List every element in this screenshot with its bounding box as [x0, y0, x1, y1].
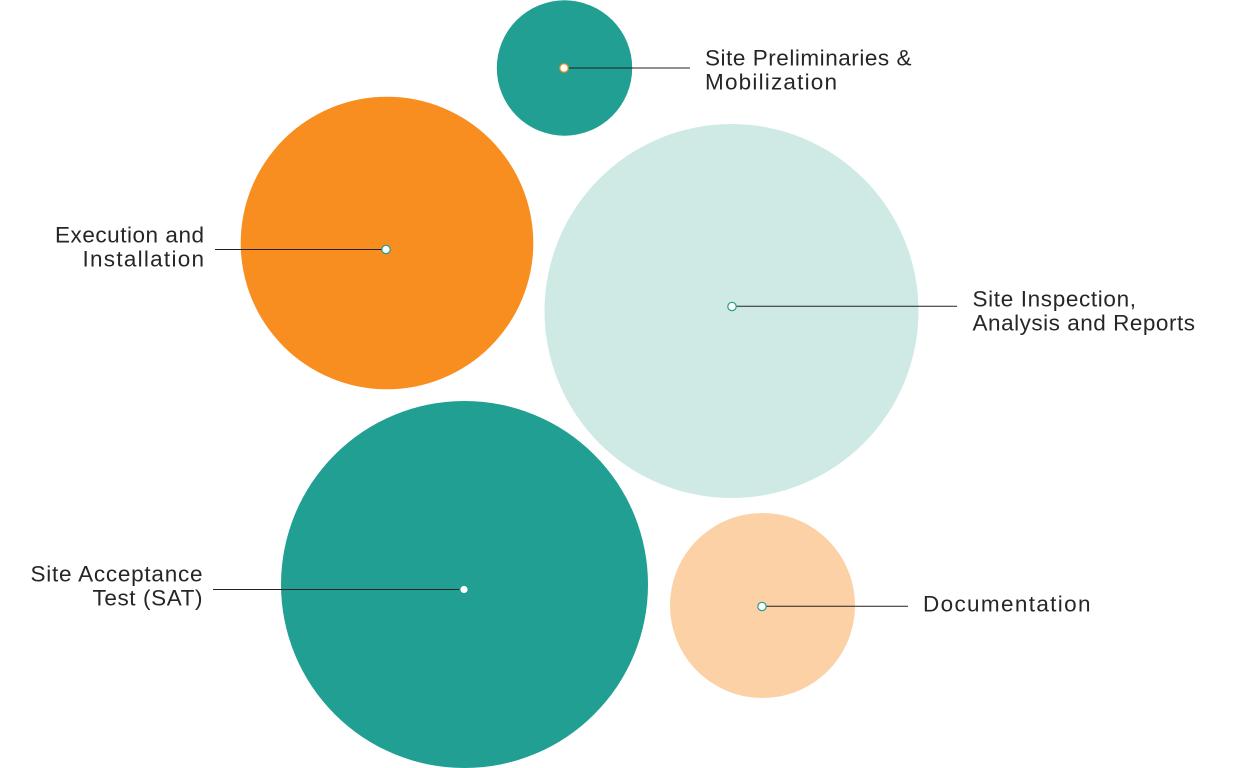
bubble: Site Acceptance Test (SAT): [30, 401, 648, 768]
bubble: Site Preliminaries & Mobilization: Mobilization: [705, 70, 837, 94]
bubble: Documentation: Documentation: [923, 592, 1090, 616]
bubble: Execution and Installation: Execution and: [55, 222, 204, 248]
bubble: Site Inspection, Analysis and Reports: Site Inspection,: [972, 286, 1136, 312]
bubble: Site Inspection, Analysis and Reports: [544, 124, 1195, 498]
bubble: Site Acceptance Test (SAT): Test (SAT): [92, 586, 202, 610]
bubble: Site Preliminaries & Mobilization: [497, 0, 912, 136]
bubble: Site Acceptance Test (SAT): Site Acceptance: [30, 562, 202, 586]
bubble: Documentation: [670, 513, 1090, 698]
bubble: Site Preliminaries & Mobilization: Site Preliminaries &: [705, 46, 912, 70]
bubble: Execution and Installation: Installation: [82, 246, 204, 272]
bubble: Execution and Installation: [55, 97, 533, 389]
bubble: Site Inspection, Analysis and Reports: Analysis and Reports: [972, 310, 1195, 336]
